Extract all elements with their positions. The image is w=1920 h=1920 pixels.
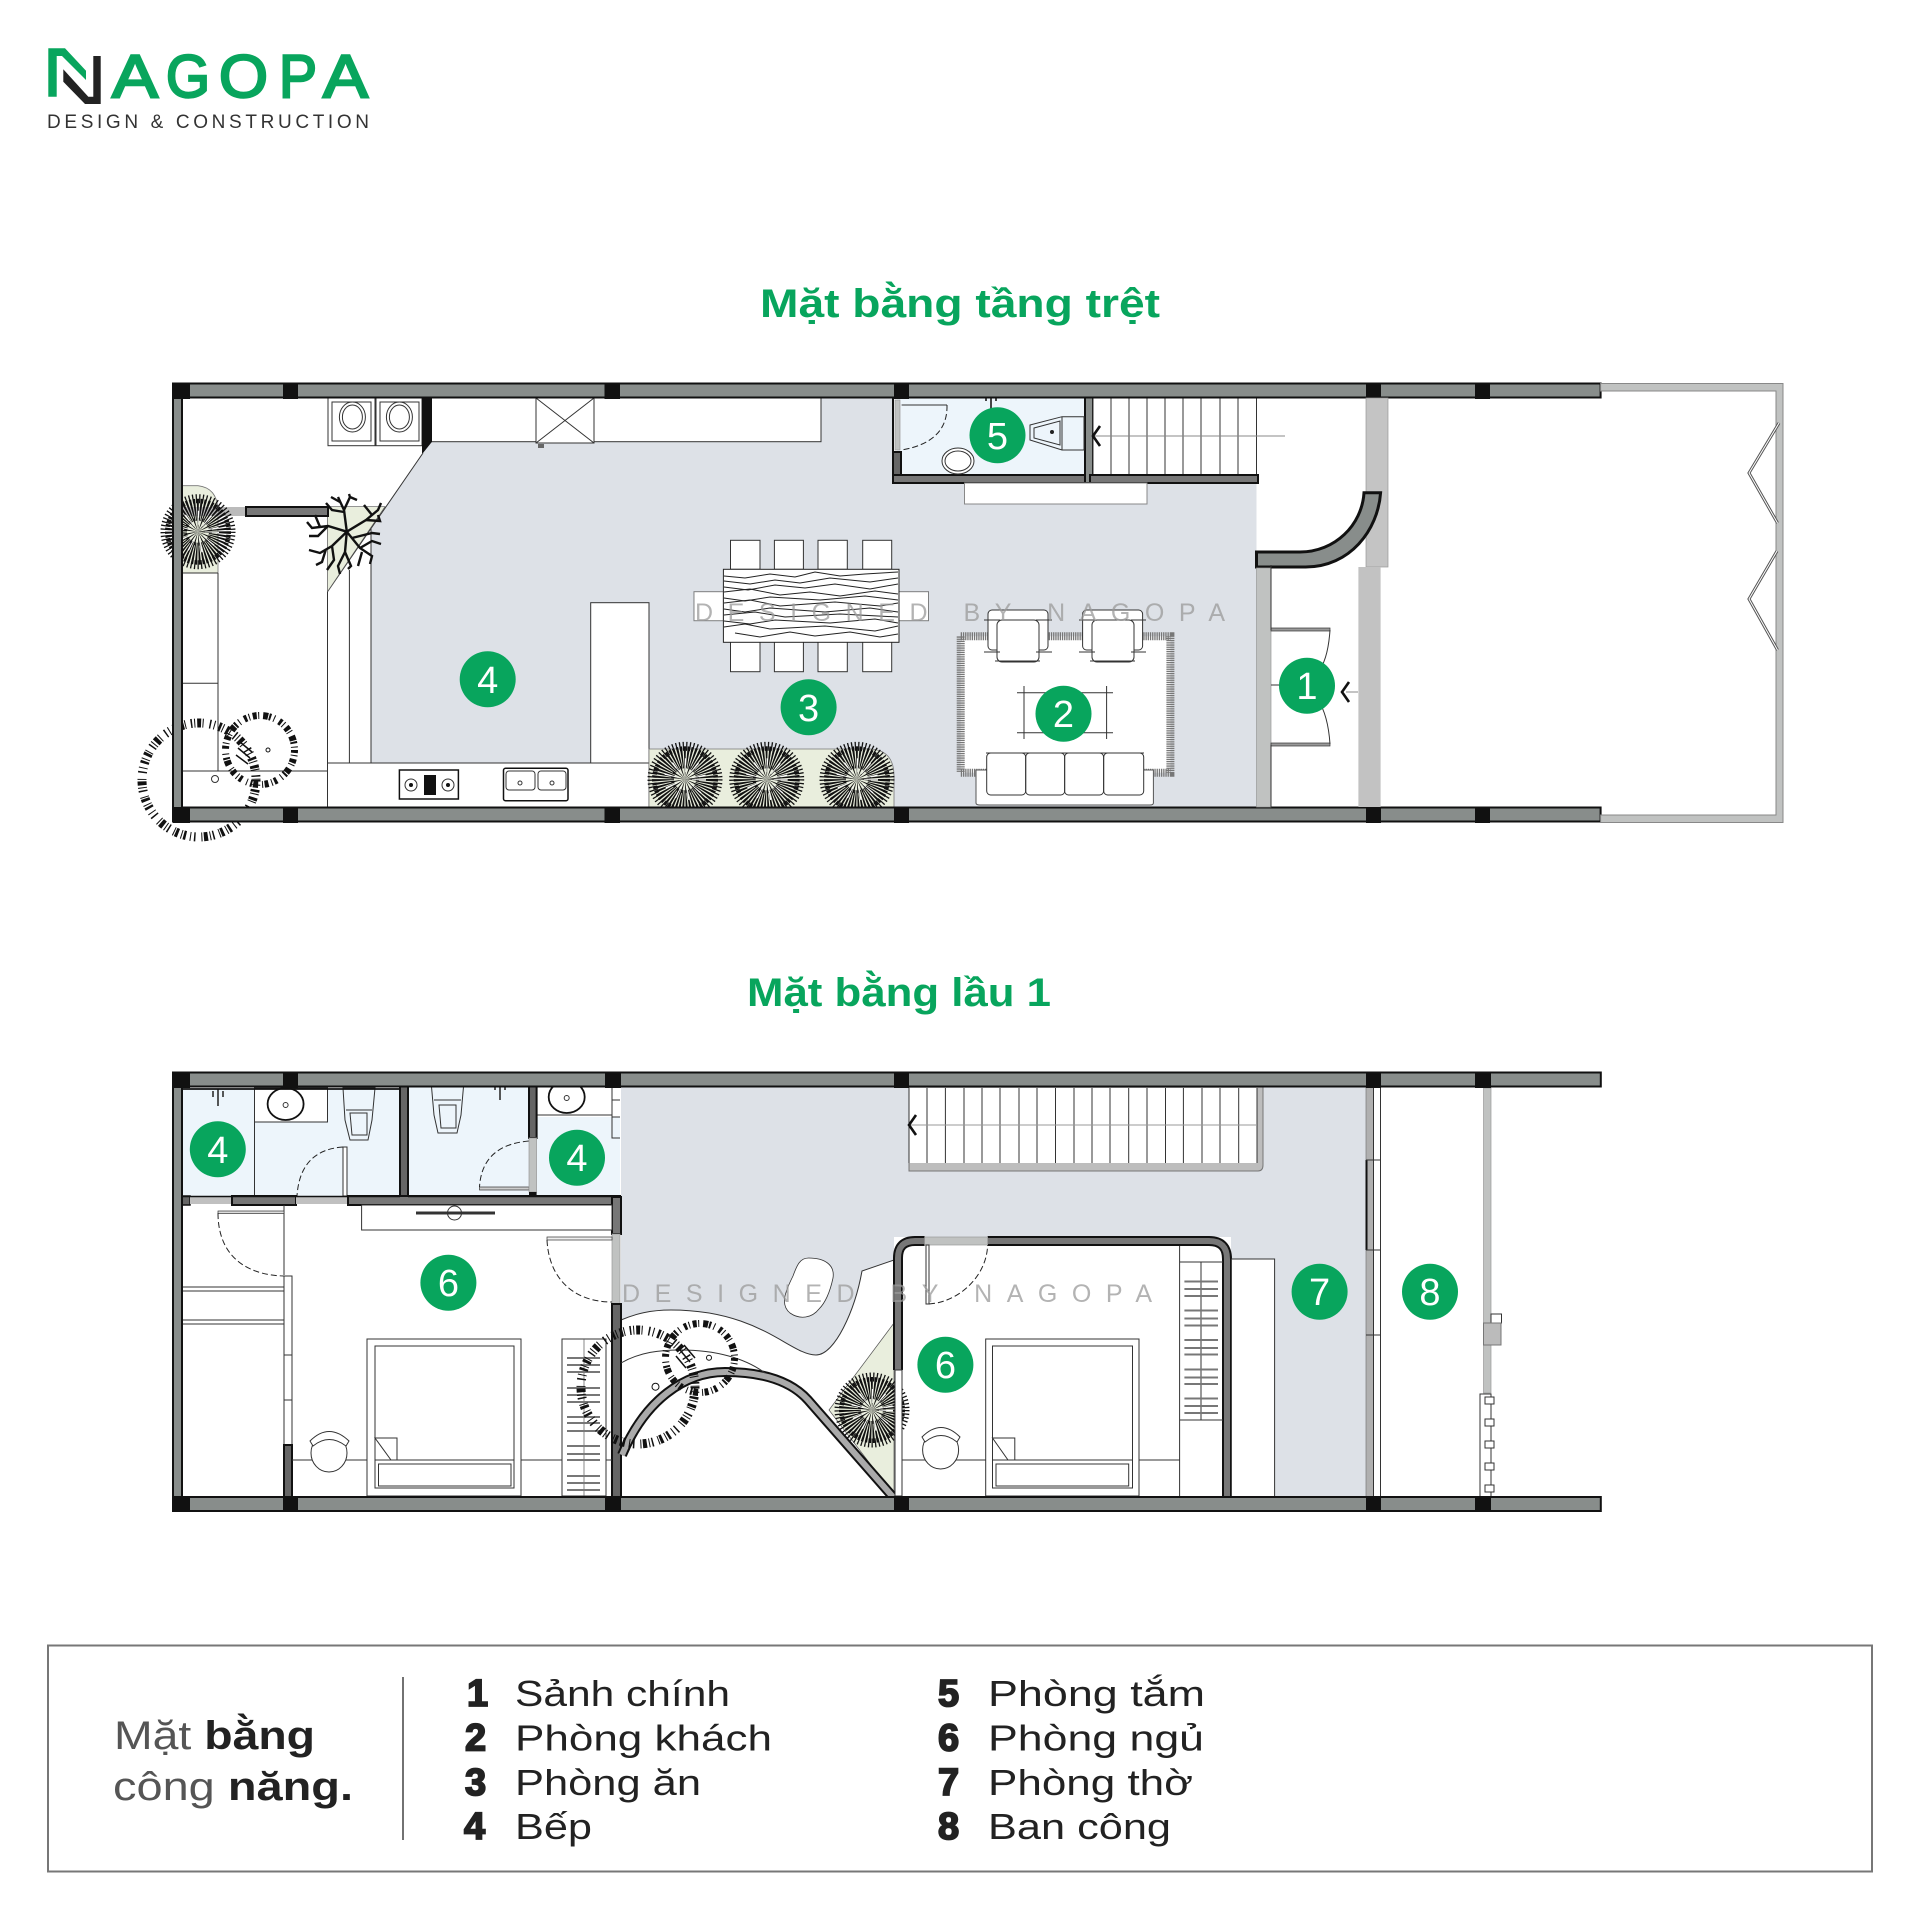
armchairs bbox=[984, 610, 1146, 662]
legend title bbox=[113, 1712, 353, 1809]
heading: ground floor: Mặt bằng tầng trệt bbox=[760, 280, 1160, 326]
kitchen island bbox=[591, 603, 649, 763]
chair left bbox=[310, 1432, 349, 1472]
legend column 2: Phòng ngủ bbox=[988, 1718, 1204, 1758]
left planter bbox=[182, 486, 218, 573]
badge 3: 3 bbox=[798, 688, 819, 730]
logo wordmark bbox=[112, 43, 368, 110]
living floor area bbox=[371, 398, 1256, 807]
badge 6 right bbox=[917, 1337, 973, 1393]
bed left bbox=[292, 1339, 612, 1496]
left closet and door bbox=[182, 1205, 292, 1497]
badge 8 bbox=[1402, 1264, 1458, 1320]
bathrooms bbox=[182, 1081, 620, 1196]
legend column 1: Sảnh chính bbox=[515, 1673, 730, 1714]
legend column 1: 2 bbox=[465, 1718, 486, 1760]
legend column 2: 8 bbox=[938, 1806, 959, 1848]
badge 4 left: 4 bbox=[207, 1130, 228, 1172]
badge 4 bbox=[460, 651, 516, 707]
badge 6 left bbox=[420, 1255, 476, 1311]
entry walls bbox=[1256, 398, 1388, 807]
badge 6 left: 6 bbox=[438, 1263, 459, 1305]
island blob bbox=[784, 1258, 833, 1317]
door room 6 right bbox=[926, 1245, 988, 1304]
logo tagline: DESIGN & CONSTRUCTION bbox=[47, 112, 369, 133]
badge 4 right: 4 bbox=[566, 1138, 588, 1180]
legend column 1: 4 bbox=[464, 1806, 485, 1848]
void and hall floor bbox=[621, 1087, 1366, 1497]
planter with shrubs bbox=[649, 746, 894, 812]
heading: upper floor: Mặt bằng lầu 1 bbox=[747, 969, 1051, 1015]
back yard cabinets bbox=[182, 529, 371, 807]
badge 2: 2 bbox=[1053, 694, 1074, 736]
void edge line bbox=[621, 1260, 894, 1355]
icon: shrub left bbox=[165, 499, 231, 565]
upper staircase bbox=[909, 1087, 1263, 1171]
legend column 1: 1 bbox=[467, 1673, 488, 1715]
dashed tree circles bbox=[142, 716, 294, 837]
legend column 2: 5 bbox=[938, 1673, 959, 1715]
staircase bbox=[1090, 398, 1285, 483]
wardrobe right bbox=[1180, 1246, 1223, 1496]
panel: legend bbox=[48, 1646, 1872, 1872]
logo wordmark: G bbox=[166, 43, 210, 110]
logo wordmark: A bbox=[323, 43, 368, 110]
shelf left bbox=[562, 1339, 606, 1496]
logo wordmark: O bbox=[219, 43, 268, 110]
badge 4 right bbox=[549, 1130, 605, 1186]
badge 7: 7 bbox=[1309, 1272, 1330, 1314]
washing machines bbox=[328, 398, 422, 446]
badge 5: 5 bbox=[987, 416, 1008, 458]
icon: tree bbox=[307, 494, 381, 574]
legend column 2: 6 bbox=[938, 1718, 959, 1760]
legend column 2: Phòng thờ bbox=[988, 1762, 1193, 1803]
cooktop bbox=[399, 770, 458, 799]
console under stairs bbox=[964, 483, 1147, 504]
legend column 2: Ban công bbox=[988, 1806, 1171, 1847]
badge 2 bbox=[1036, 686, 1092, 742]
kitchen sink bbox=[504, 768, 568, 801]
legend title: Mặt bằng bbox=[114, 1712, 315, 1758]
balcony door wall bbox=[1366, 1087, 1381, 1497]
interior partition bbox=[182, 507, 328, 516]
upper floor plan bbox=[173, 1072, 1601, 1512]
front terrace bbox=[1601, 384, 1783, 822]
coffee table bbox=[1017, 686, 1113, 739]
exterior walls top and bottom bbox=[173, 383, 1601, 823]
legend column 1: Bếp bbox=[515, 1806, 592, 1847]
badge 4: 4 bbox=[477, 660, 498, 702]
dining set bbox=[694, 540, 928, 672]
legend column 2 bbox=[938, 1673, 1205, 1848]
legend column 2: 7 bbox=[938, 1762, 959, 1804]
bathroom bbox=[893, 392, 1093, 483]
kitchen diagonal wall bbox=[328, 398, 432, 592]
curved garden wall bbox=[621, 1350, 893, 1497]
logo mark bbox=[48, 48, 101, 104]
icon: shrub bbox=[839, 1377, 905, 1443]
bathroom walls bbox=[181, 1079, 621, 1497]
entry doors bbox=[1271, 565, 1358, 807]
pale planter triangle bbox=[328, 507, 385, 592]
bed right bbox=[902, 1339, 1180, 1496]
legend title: công năng. bbox=[113, 1765, 353, 1809]
top counter bbox=[431, 398, 821, 448]
bottom counter bbox=[328, 763, 649, 807]
logo wordmark: A bbox=[112, 43, 158, 110]
legend column 1: 3 bbox=[465, 1762, 486, 1804]
sofa bbox=[976, 753, 1153, 805]
dashed tree circles bbox=[581, 1324, 734, 1444]
watermark: DESIGNED BY NAGOPA bbox=[695, 599, 1225, 627]
legend column 2: Phòng tắm bbox=[988, 1673, 1205, 1714]
badge 3 bbox=[781, 679, 837, 735]
ground floor plan bbox=[142, 383, 1783, 837]
legend divider bbox=[402, 1677, 404, 1840]
legend column 1 bbox=[464, 1673, 772, 1848]
right bedroom walls bbox=[895, 1237, 1227, 1497]
exterior walls bbox=[173, 1072, 1601, 1512]
living room rug bbox=[961, 636, 1170, 773]
badge 1: 1 bbox=[1296, 666, 1318, 708]
wardrobe top bbox=[362, 1205, 612, 1230]
badge 5 bbox=[970, 407, 1026, 463]
badge 7 bbox=[1292, 1264, 1348, 1320]
cabinet in hall bbox=[1231, 1259, 1275, 1497]
logo bbox=[47, 43, 369, 133]
badge 1 bbox=[1279, 658, 1335, 714]
badge 4 left bbox=[190, 1121, 246, 1177]
legend column 1: Phòng khách bbox=[515, 1718, 772, 1758]
watermark: DESIGNED BY NAGOPA bbox=[622, 1280, 1152, 1308]
legend column 1: Phòng ăn bbox=[515, 1762, 701, 1803]
pale planter wedge bbox=[829, 1323, 894, 1495]
logo wordmark: P bbox=[279, 43, 317, 110]
badge 6 right: 6 bbox=[935, 1345, 956, 1387]
badge 8: 8 bbox=[1419, 1272, 1441, 1314]
balcony railing bbox=[1480, 1088, 1502, 1497]
chair right bbox=[922, 1428, 960, 1469]
door room 6 left bbox=[547, 1237, 612, 1302]
